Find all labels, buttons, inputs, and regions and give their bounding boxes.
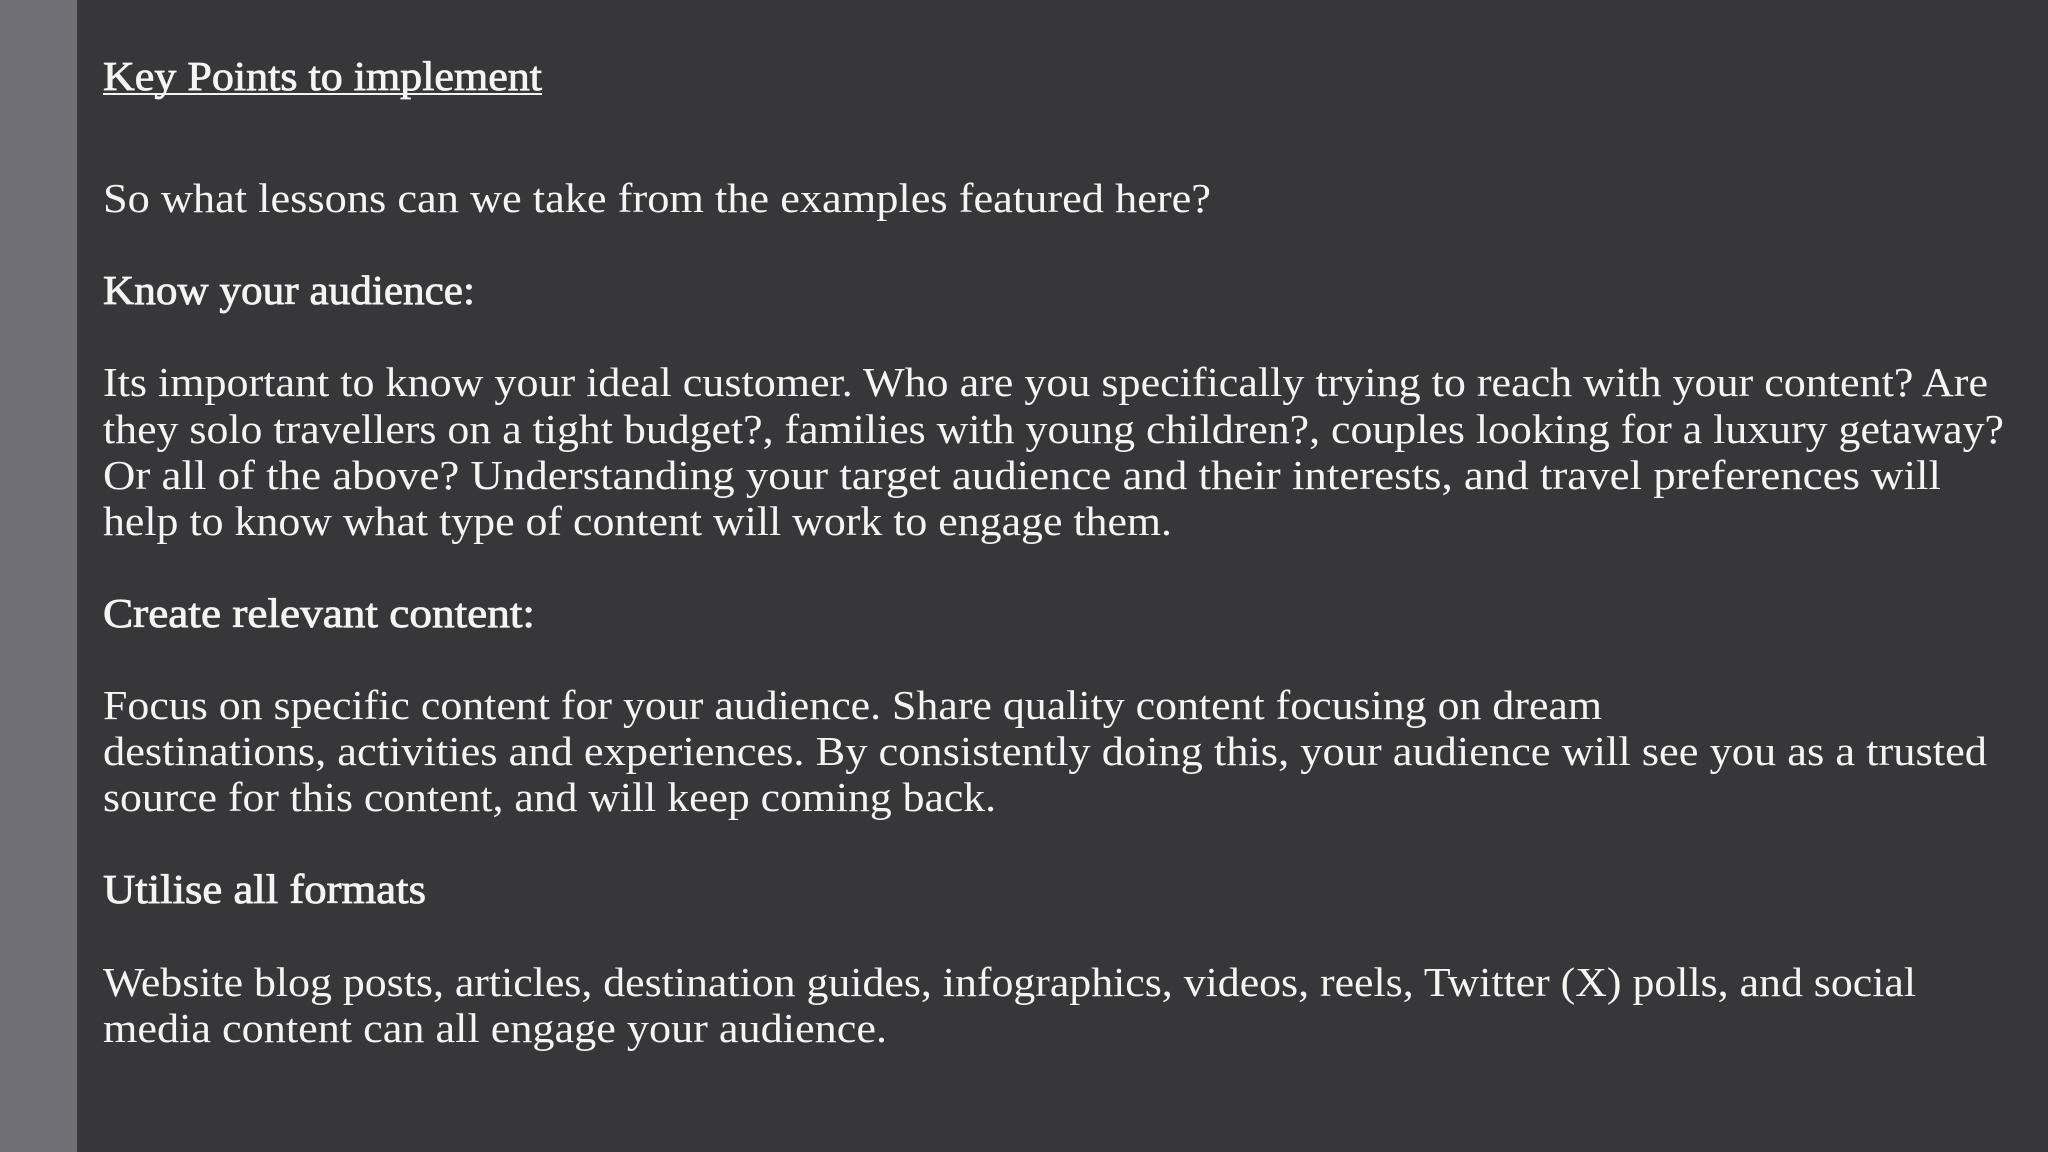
heading: utilise all formats: Utilise all formats <box>103 866 426 912</box>
text block: create relevant content: Focus on specific content for your audience. Share quality content focusing on dream <box>103 682 1602 728</box>
intro question: So what lessons can we take from the examples featured here? <box>103 175 1211 221</box>
title: Key Points to implement <box>103 53 543 99</box>
left sidebar <box>0 0 77 1152</box>
text block: create relevant content <box>103 682 1987 820</box>
text block: utilise all formats: Website blog posts, articles, destination guides, infographics, videos, reels, Twitter (X) polls, and social <box>103 959 1916 1005</box>
text block: create relevant content: source for this content, and will keep coming back. <box>103 774 996 820</box>
text block: know your audience: Or all of the above? Understanding your target audience and their interests, and travel preferences will <box>103 452 1941 498</box>
text block: know your audience <box>103 359 2004 544</box>
heading: create relevant content: Create relevant content: <box>103 590 535 636</box>
text block: know your audience: Its important to know your ideal customer. Who are you specifically trying to reach with your content? Are <box>103 359 1988 405</box>
text block: know your audience: help to know what type of content will work to engage them. <box>103 498 1172 544</box>
text block: create relevant content: destinations, activities and experiences. By consistently doing this, your audience will see you as a trusted <box>103 728 1987 774</box>
text block: utilise all formats <box>103 959 1916 1051</box>
text block: know your audience: they solo travellers on a tight budget?, families with young children?, couples looking for a luxury getaway? <box>103 406 2004 452</box>
heading: know your audience: Know your audience: <box>103 267 475 313</box>
text block: utilise all formats: media content can all engage your audience. <box>103 1005 887 1051</box>
